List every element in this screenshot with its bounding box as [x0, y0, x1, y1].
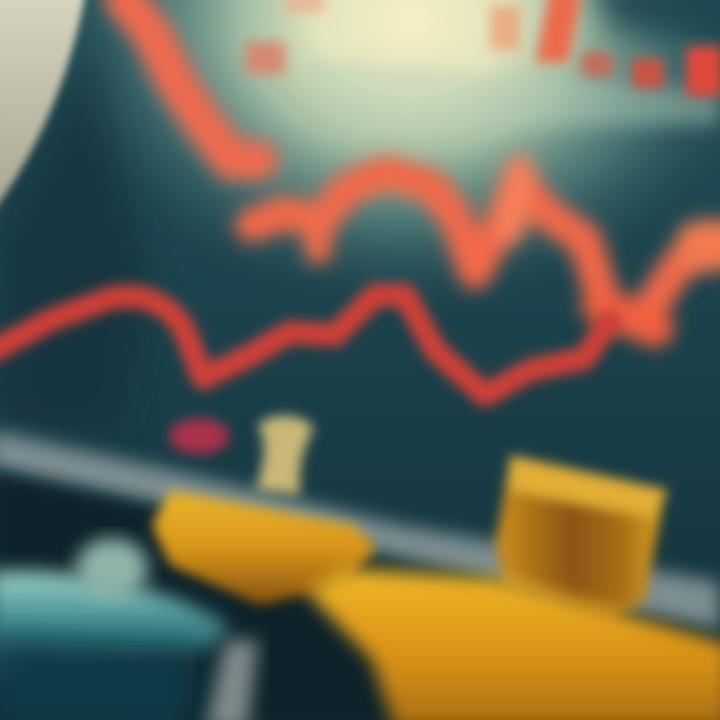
teal object bottom-left — [0, 538, 228, 720]
small pale weight on gold block — [256, 416, 314, 495]
gold weight stack right — [495, 455, 668, 620]
teal lower tone — [0, 640, 200, 720]
upper red-orange chart line — [125, 0, 720, 328]
pale band across top right — [300, 60, 720, 130]
darker left side of chart — [0, 30, 150, 430]
grey shelf edge — [0, 430, 720, 630]
teal object knob — [76, 538, 148, 598]
pale wedge in upper-left corner — [0, 0, 86, 215]
dark upper-right corner — [590, 0, 720, 50]
scattered red blocks at top — [245, 0, 720, 96]
grey stand below teal object — [205, 640, 258, 720]
lower red chart line — [0, 295, 610, 395]
small red smudge below line — [169, 418, 229, 454]
dark foreground — [0, 470, 720, 720]
light glow at top — [0, 0, 720, 380]
gold balance left block — [152, 490, 376, 605]
large gold plate bottom right — [305, 568, 720, 720]
